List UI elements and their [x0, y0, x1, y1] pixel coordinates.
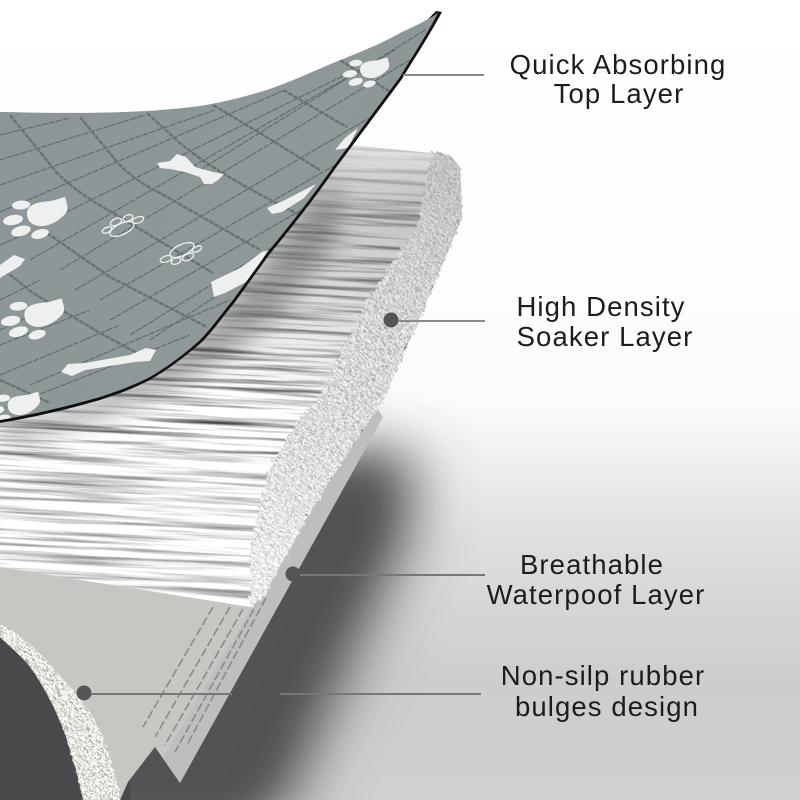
label: Quick Absorbing Top Layer: Top Layer — [554, 78, 684, 109]
label: High Density Soaker Layer: High Density — [516, 291, 686, 322]
sheet black edge — [0, 11, 442, 423]
label: Non-silp rubber bulges design: bulges design — [515, 691, 699, 722]
soaker foam edge — [248, 150, 463, 608]
label: Non-silp rubber bulges design: Non-silp rubber — [501, 660, 705, 691]
label: Breathable Waterpoof Layer: Waterpoof Layer — [487, 579, 705, 610]
stitched seams — [143, 598, 266, 752]
fine stitched lines — [0, 30, 425, 410]
callout: dot and leader lines to rubber bulges — [76, 686, 481, 700]
panel: quilted top layer sheet — [0, 11, 442, 427]
label: Quick Absorbing Top Layer: Quick Absorbing — [510, 49, 726, 80]
icon: outlined paw prints — [101, 213, 203, 266]
callout: leader line to top layer — [403, 74, 484, 76]
waterproof strip highlights — [163, 403, 383, 783]
callout: dot and leader line to soaker layer — [384, 312, 485, 328]
icon: bones and cut-off shapes — [0, 128, 358, 376]
quilting grid lines — [0, 60, 395, 403]
panel: breathable waterproof layer and backing — [0, 403, 383, 800]
label: High Density Soaker Layer: Soaker Layer — [517, 321, 693, 352]
icon: paw prints — [0, 57, 389, 427]
rubber bulges band — [0, 620, 125, 800]
callout: dot and leader line to waterproof layer — [286, 566, 485, 582]
panel: high density soaker layer — [0, 145, 463, 608]
label: Breathable Waterpoof Layer: Breathable — [520, 549, 664, 580]
